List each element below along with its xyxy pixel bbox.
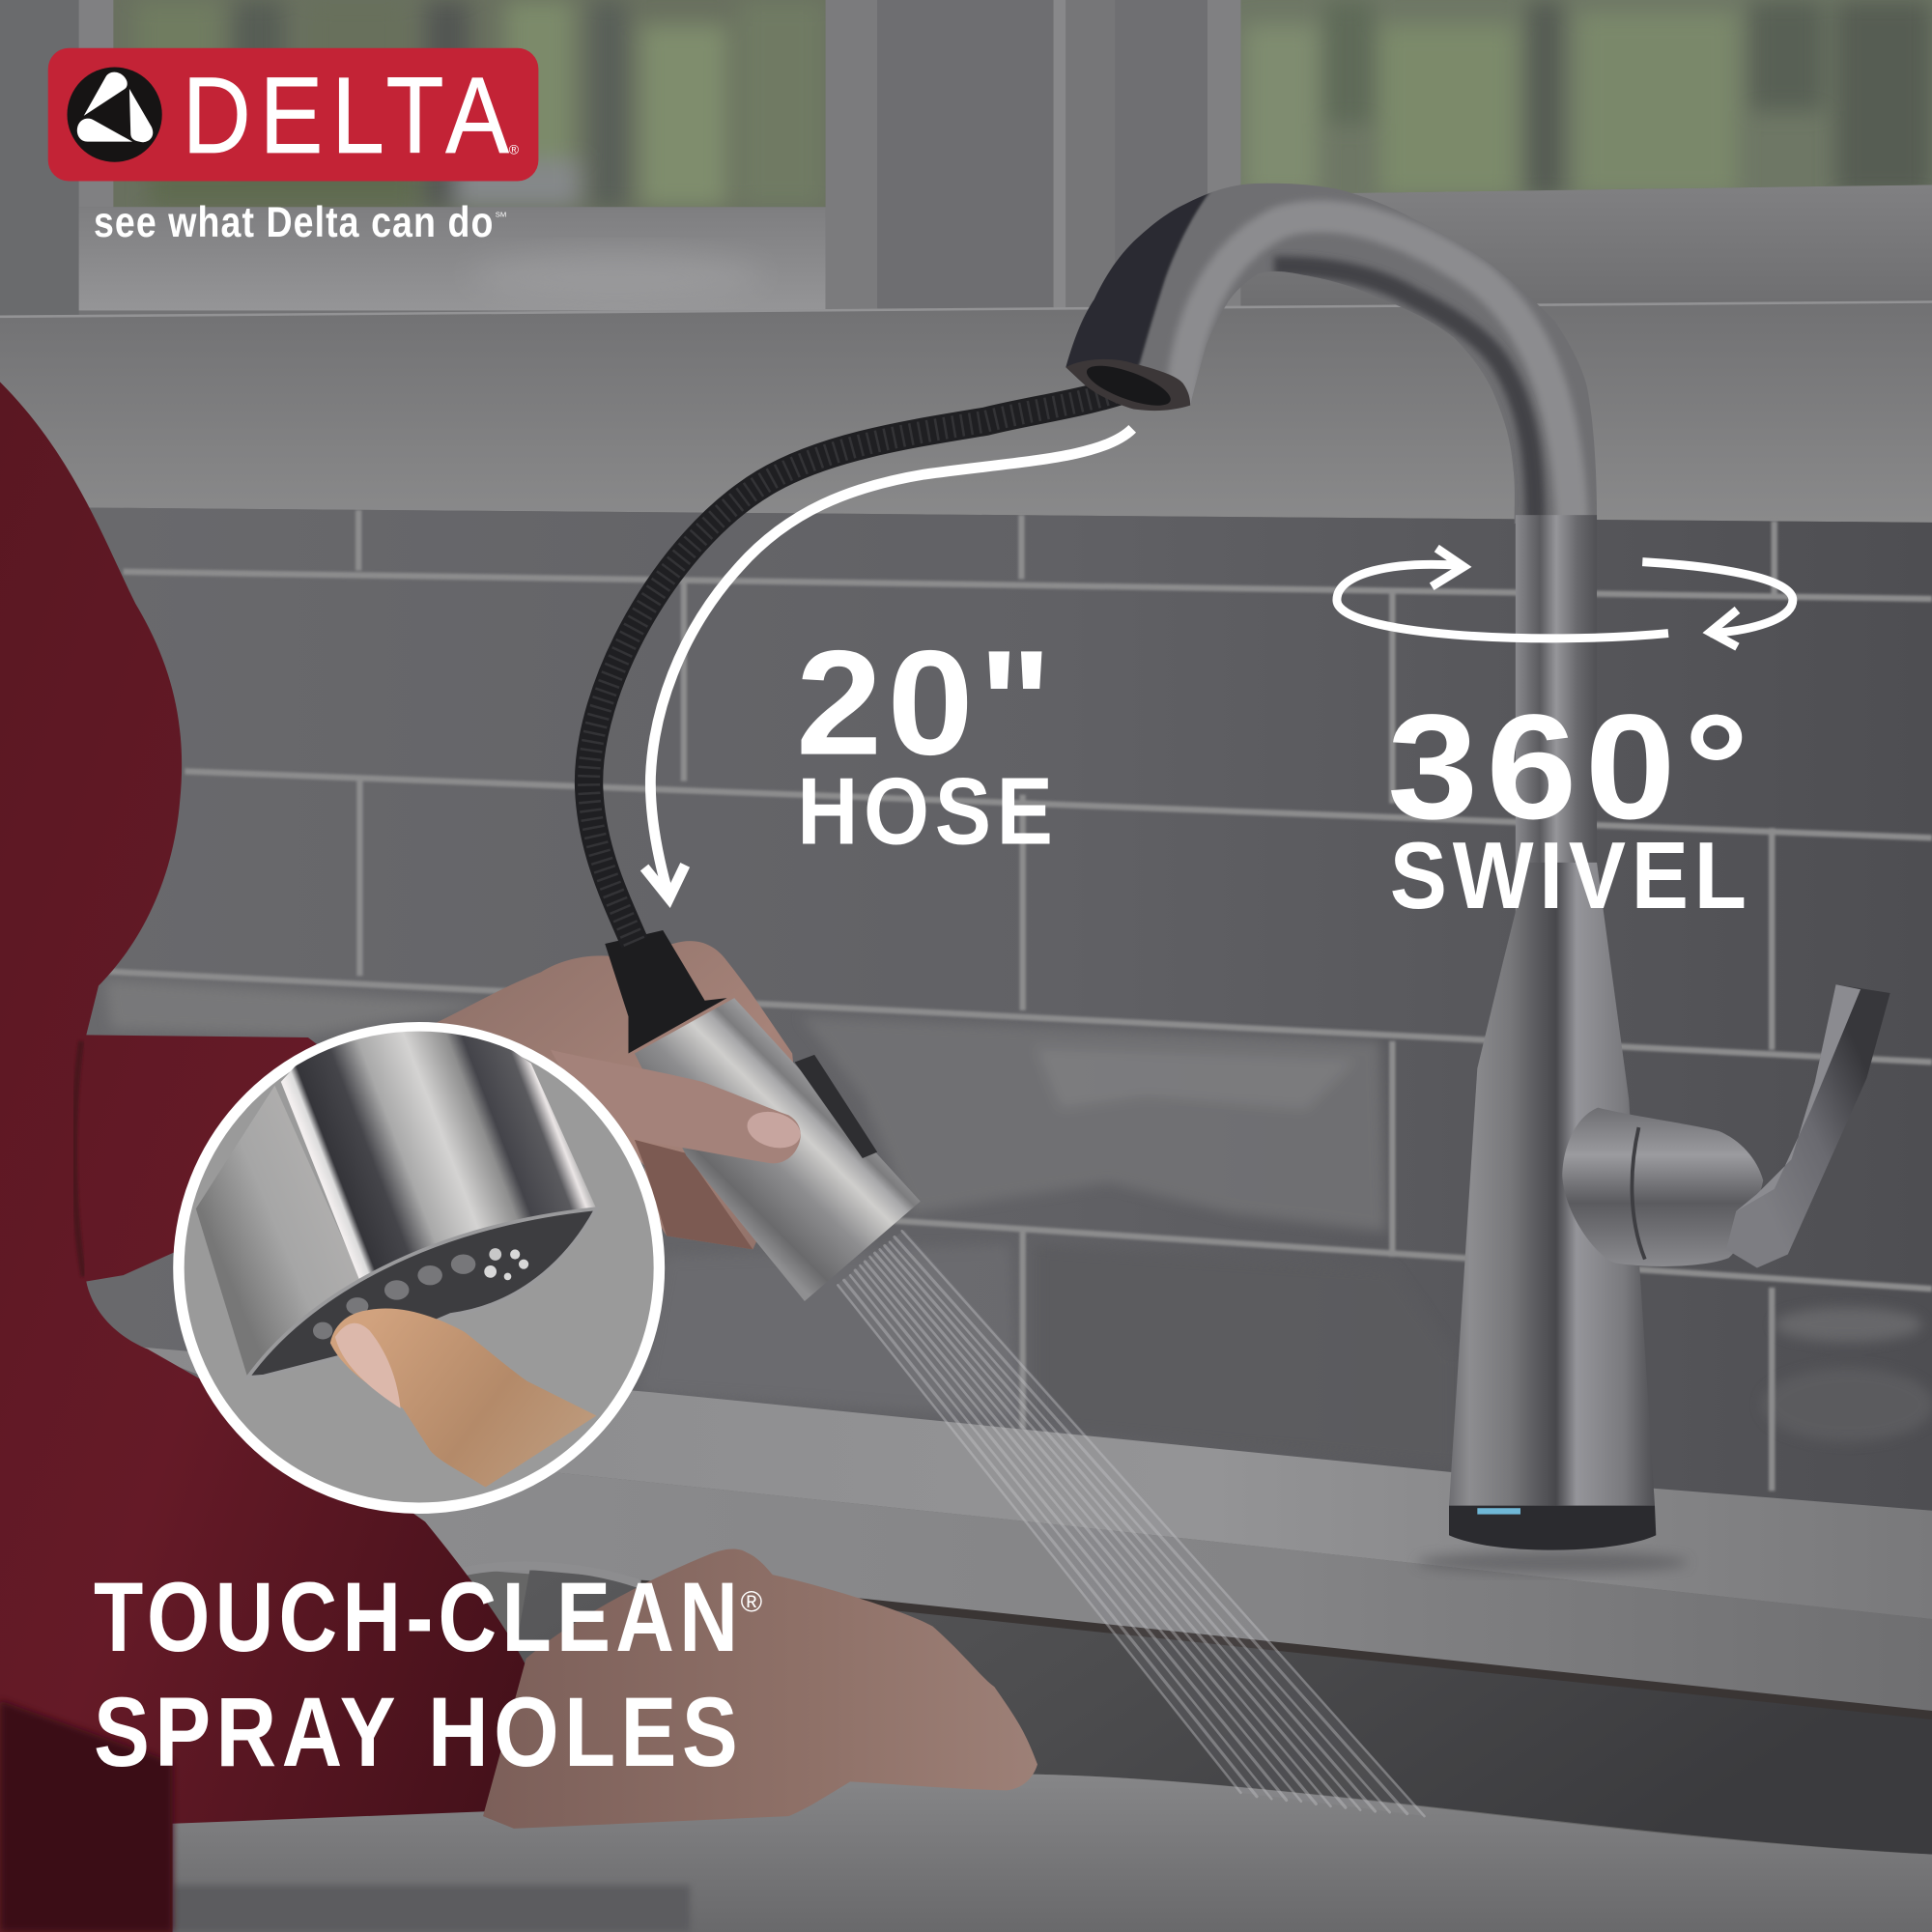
hose length arrow (644, 429, 1132, 898)
cabinet shadow (173, 1886, 690, 1932)
window wall background (0, 0, 1932, 323)
countertop (124, 1346, 1932, 1718)
front counter edge (173, 1775, 1932, 1932)
swivel label: 360° (1387, 683, 1757, 850)
sprayer body (635, 998, 921, 1301)
person sweater (0, 382, 538, 1932)
tagline: see what Delta can do (94, 199, 494, 246)
faucet (1047, 173, 1890, 1550)
touch LED (1477, 1508, 1520, 1515)
tagline: SM (496, 210, 506, 218)
thumb on sprayer (551, 1050, 805, 1163)
window sill band (0, 301, 1932, 523)
right window view (1240, 0, 1932, 197)
water spray (837, 1230, 1426, 1816)
sprayer collar (605, 930, 727, 1054)
feature caption: touch-clean spray holes: TOUCH-CLEAN (94, 1562, 743, 1672)
faucet spout (1066, 184, 1597, 524)
lower hand on sink (483, 1548, 1037, 1829)
sprayer button (795, 1055, 877, 1158)
registered mark: ® (509, 141, 520, 156)
hose length label: HOSE (797, 758, 1059, 865)
faucet lever (1726, 984, 1890, 1267)
spray nozzles (313, 1248, 528, 1339)
logo emblem (68, 68, 162, 162)
spray face (247, 1208, 596, 1378)
left window view (113, 0, 826, 207)
swivel rotation arrows (1337, 549, 1793, 647)
logo red badge (48, 48, 538, 181)
faucet base body (1449, 863, 1655, 1506)
Delta logo (48, 48, 538, 181)
faucet base ring (1449, 1506, 1656, 1550)
inset circle: touch-clean spray holes (179, 1023, 659, 1508)
hose length label: 20" (796, 619, 1057, 786)
logo wordmark: DELTA (183, 54, 518, 176)
swivel label: SWIVEL (1390, 822, 1752, 928)
fingertip (330, 1309, 596, 1488)
swivel label (1387, 683, 1757, 928)
sprayer cylinder (281, 1023, 596, 1284)
pull-down hose (589, 384, 1140, 943)
faucet handle knob (1562, 1108, 1763, 1266)
tile backsplash (0, 499, 1932, 1528)
faucet neck (1516, 515, 1597, 922)
sprayer head (605, 930, 921, 1301)
feature caption: touch-clean spray holes (94, 1562, 763, 1787)
hose length label (796, 619, 1059, 865)
sprayer side panel (196, 1086, 361, 1378)
feature caption: touch-clean spray holes: ® (741, 1585, 763, 1618)
fingernail (335, 1323, 401, 1408)
faucet spout tip (1065, 357, 1190, 413)
sink basin (443, 1566, 1932, 1855)
hand holding sprayer (431, 941, 801, 1249)
feature caption: touch-clean spray holes: SPRAY HOLES (94, 1677, 743, 1787)
